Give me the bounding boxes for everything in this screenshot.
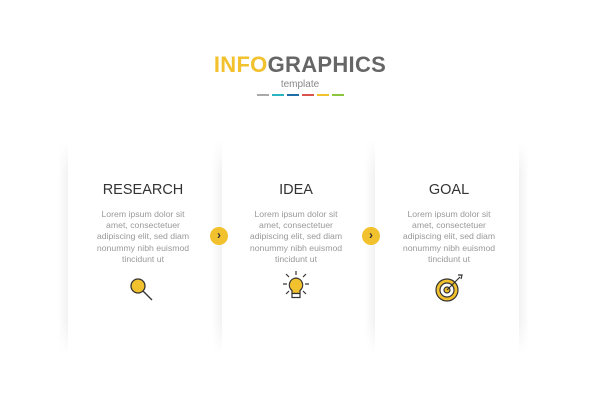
arrow 1: [210, 227, 228, 245]
arrow 1: ›: [217, 228, 221, 242]
panel: research: RESEARCH: [103, 182, 183, 198]
subtitle: template: [281, 79, 319, 90]
panel: goal: adipiscing elit, sed diam: [403, 231, 495, 241]
panel: idea: nonummy nibh euismod: [250, 243, 342, 253]
panel: goal: amet, consectetuer: [412, 220, 486, 230]
icon: bulb: [283, 271, 309, 298]
panel: idea: IDEA: [279, 182, 313, 198]
panel: research: [97, 182, 189, 300]
panel: research: adipiscing elit, sed diam: [97, 231, 189, 241]
panel: research: Lorem ipsum dolor sit: [101, 209, 185, 219]
panel: research: amet, consectetuer: [106, 220, 180, 230]
title: INFOGRAPHICS: [214, 52, 386, 77]
panel: goal: nonummy nibh euismod: [403, 243, 495, 253]
panel: idea: [250, 182, 342, 298]
panel: idea: Lorem ipsum dolor sit: [254, 209, 338, 219]
panel: idea: tincidunt ut: [275, 254, 317, 264]
panel: goal: Lorem ipsum dolor sit: [407, 209, 491, 219]
arrow 2: [362, 227, 380, 245]
color bar: [257, 94, 344, 96]
panel: goal: GOAL: [429, 182, 469, 198]
icon: magnifier: [130, 278, 152, 300]
panel: goal: [403, 182, 495, 302]
panel: research: nonummy nibh euismod: [97, 243, 189, 253]
panel: idea: amet, consectetuer: [259, 220, 333, 230]
panel: goal: tincidunt ut: [428, 254, 470, 264]
arrow 2: ›: [369, 228, 373, 242]
icon: target: [435, 274, 463, 302]
panel: research: tincidunt ut: [122, 254, 164, 264]
panel: idea: adipiscing elit, sed diam: [250, 231, 342, 241]
